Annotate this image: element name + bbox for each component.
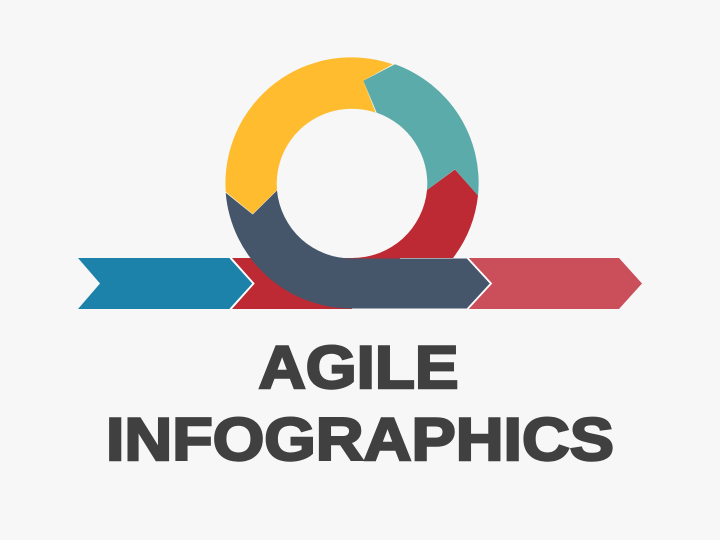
arrow: navy loop segment <box>226 190 490 309</box>
arrow: yellow loop segment <box>225 57 393 214</box>
arrow: blue start chevron <box>78 258 253 309</box>
title <box>106 333 614 473</box>
arrow outlines: white chevron edges <box>230 258 491 309</box>
arrow: final release chevron <box>467 258 642 309</box>
title line 2: INFOGRAPHICS <box>106 405 614 473</box>
title line 1: AGILE <box>258 333 458 401</box>
agile loop diagram <box>78 57 642 309</box>
arrow: red loop segment and strip <box>232 170 478 309</box>
arrow: teal loop segment <box>363 64 479 196</box>
